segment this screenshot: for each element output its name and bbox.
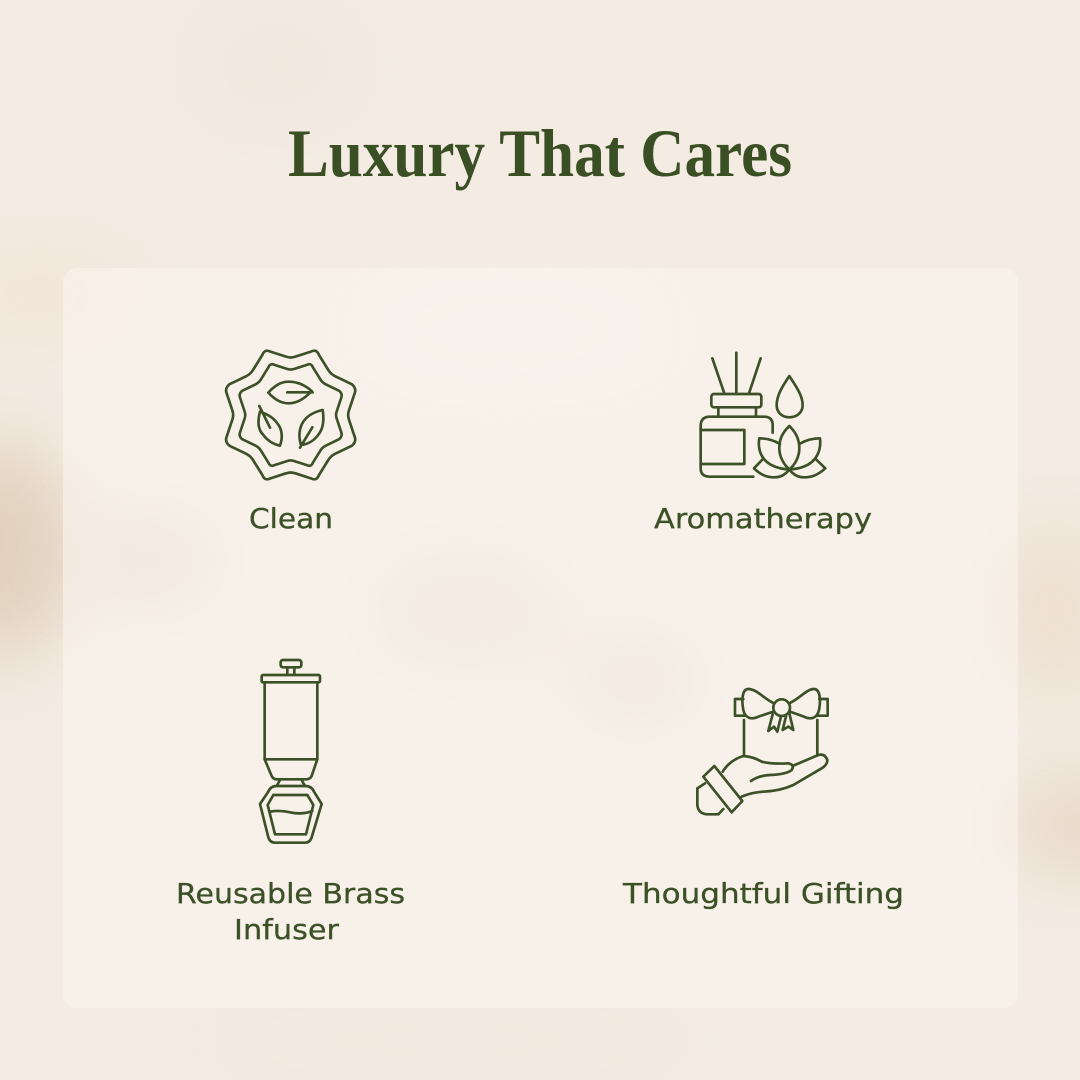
background panel <box>63 268 1018 1008</box>
label: aromatherapy: Aromatherapy <box>654 502 872 535</box>
icon: clean leaves badge <box>226 351 355 479</box>
icon: aromatherapy diffuser and lotus <box>701 353 825 477</box>
label: reusable brass infuser: Reusable Brass <box>176 877 405 910</box>
title: Luxury That Cares <box>288 115 792 191</box>
label: thoughtful gifting: Thoughtful Gifting <box>622 877 904 910</box>
label: reusable brass infuser: Infuser <box>234 913 340 946</box>
icon: reusable brass infuser <box>260 660 322 843</box>
label: clean: Clean <box>249 502 333 535</box>
label: reusable brass infuser <box>176 877 405 946</box>
icon: gift on open hand <box>697 689 828 814</box>
